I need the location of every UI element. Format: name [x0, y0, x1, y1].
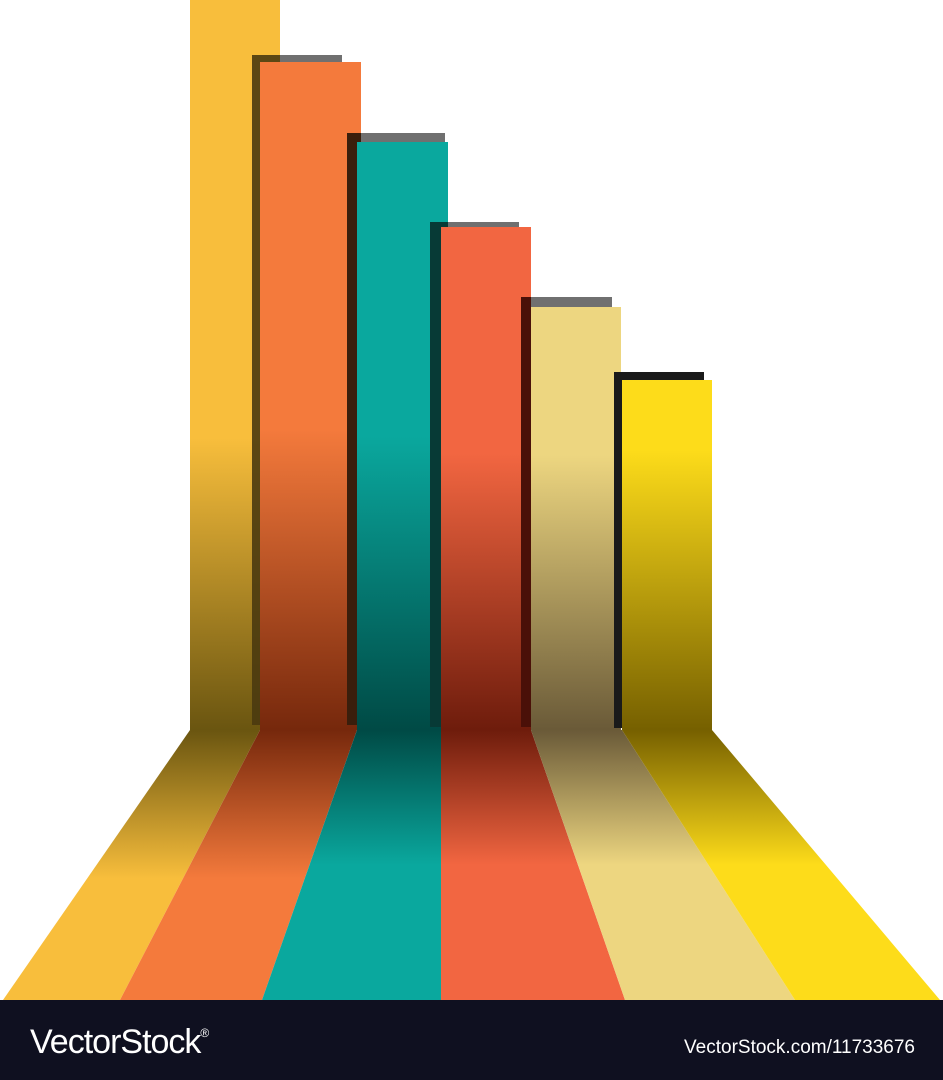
footer logo text: ®: [200, 1026, 209, 1040]
footer bar: [0, 1000, 943, 1080]
bar 5: [521, 297, 621, 730]
bar 4: [430, 222, 531, 730]
bar 2: [252, 55, 361, 730]
footer logo text: VectorStock: [30, 1023, 200, 1061]
bar 6: [614, 372, 712, 730]
footer url text: VectorStock.com/11733676: [684, 1037, 915, 1058]
floor: perspective stripes: [3, 730, 940, 1000]
bar 3: [347, 133, 448, 730]
bar 1: [190, 0, 280, 730]
